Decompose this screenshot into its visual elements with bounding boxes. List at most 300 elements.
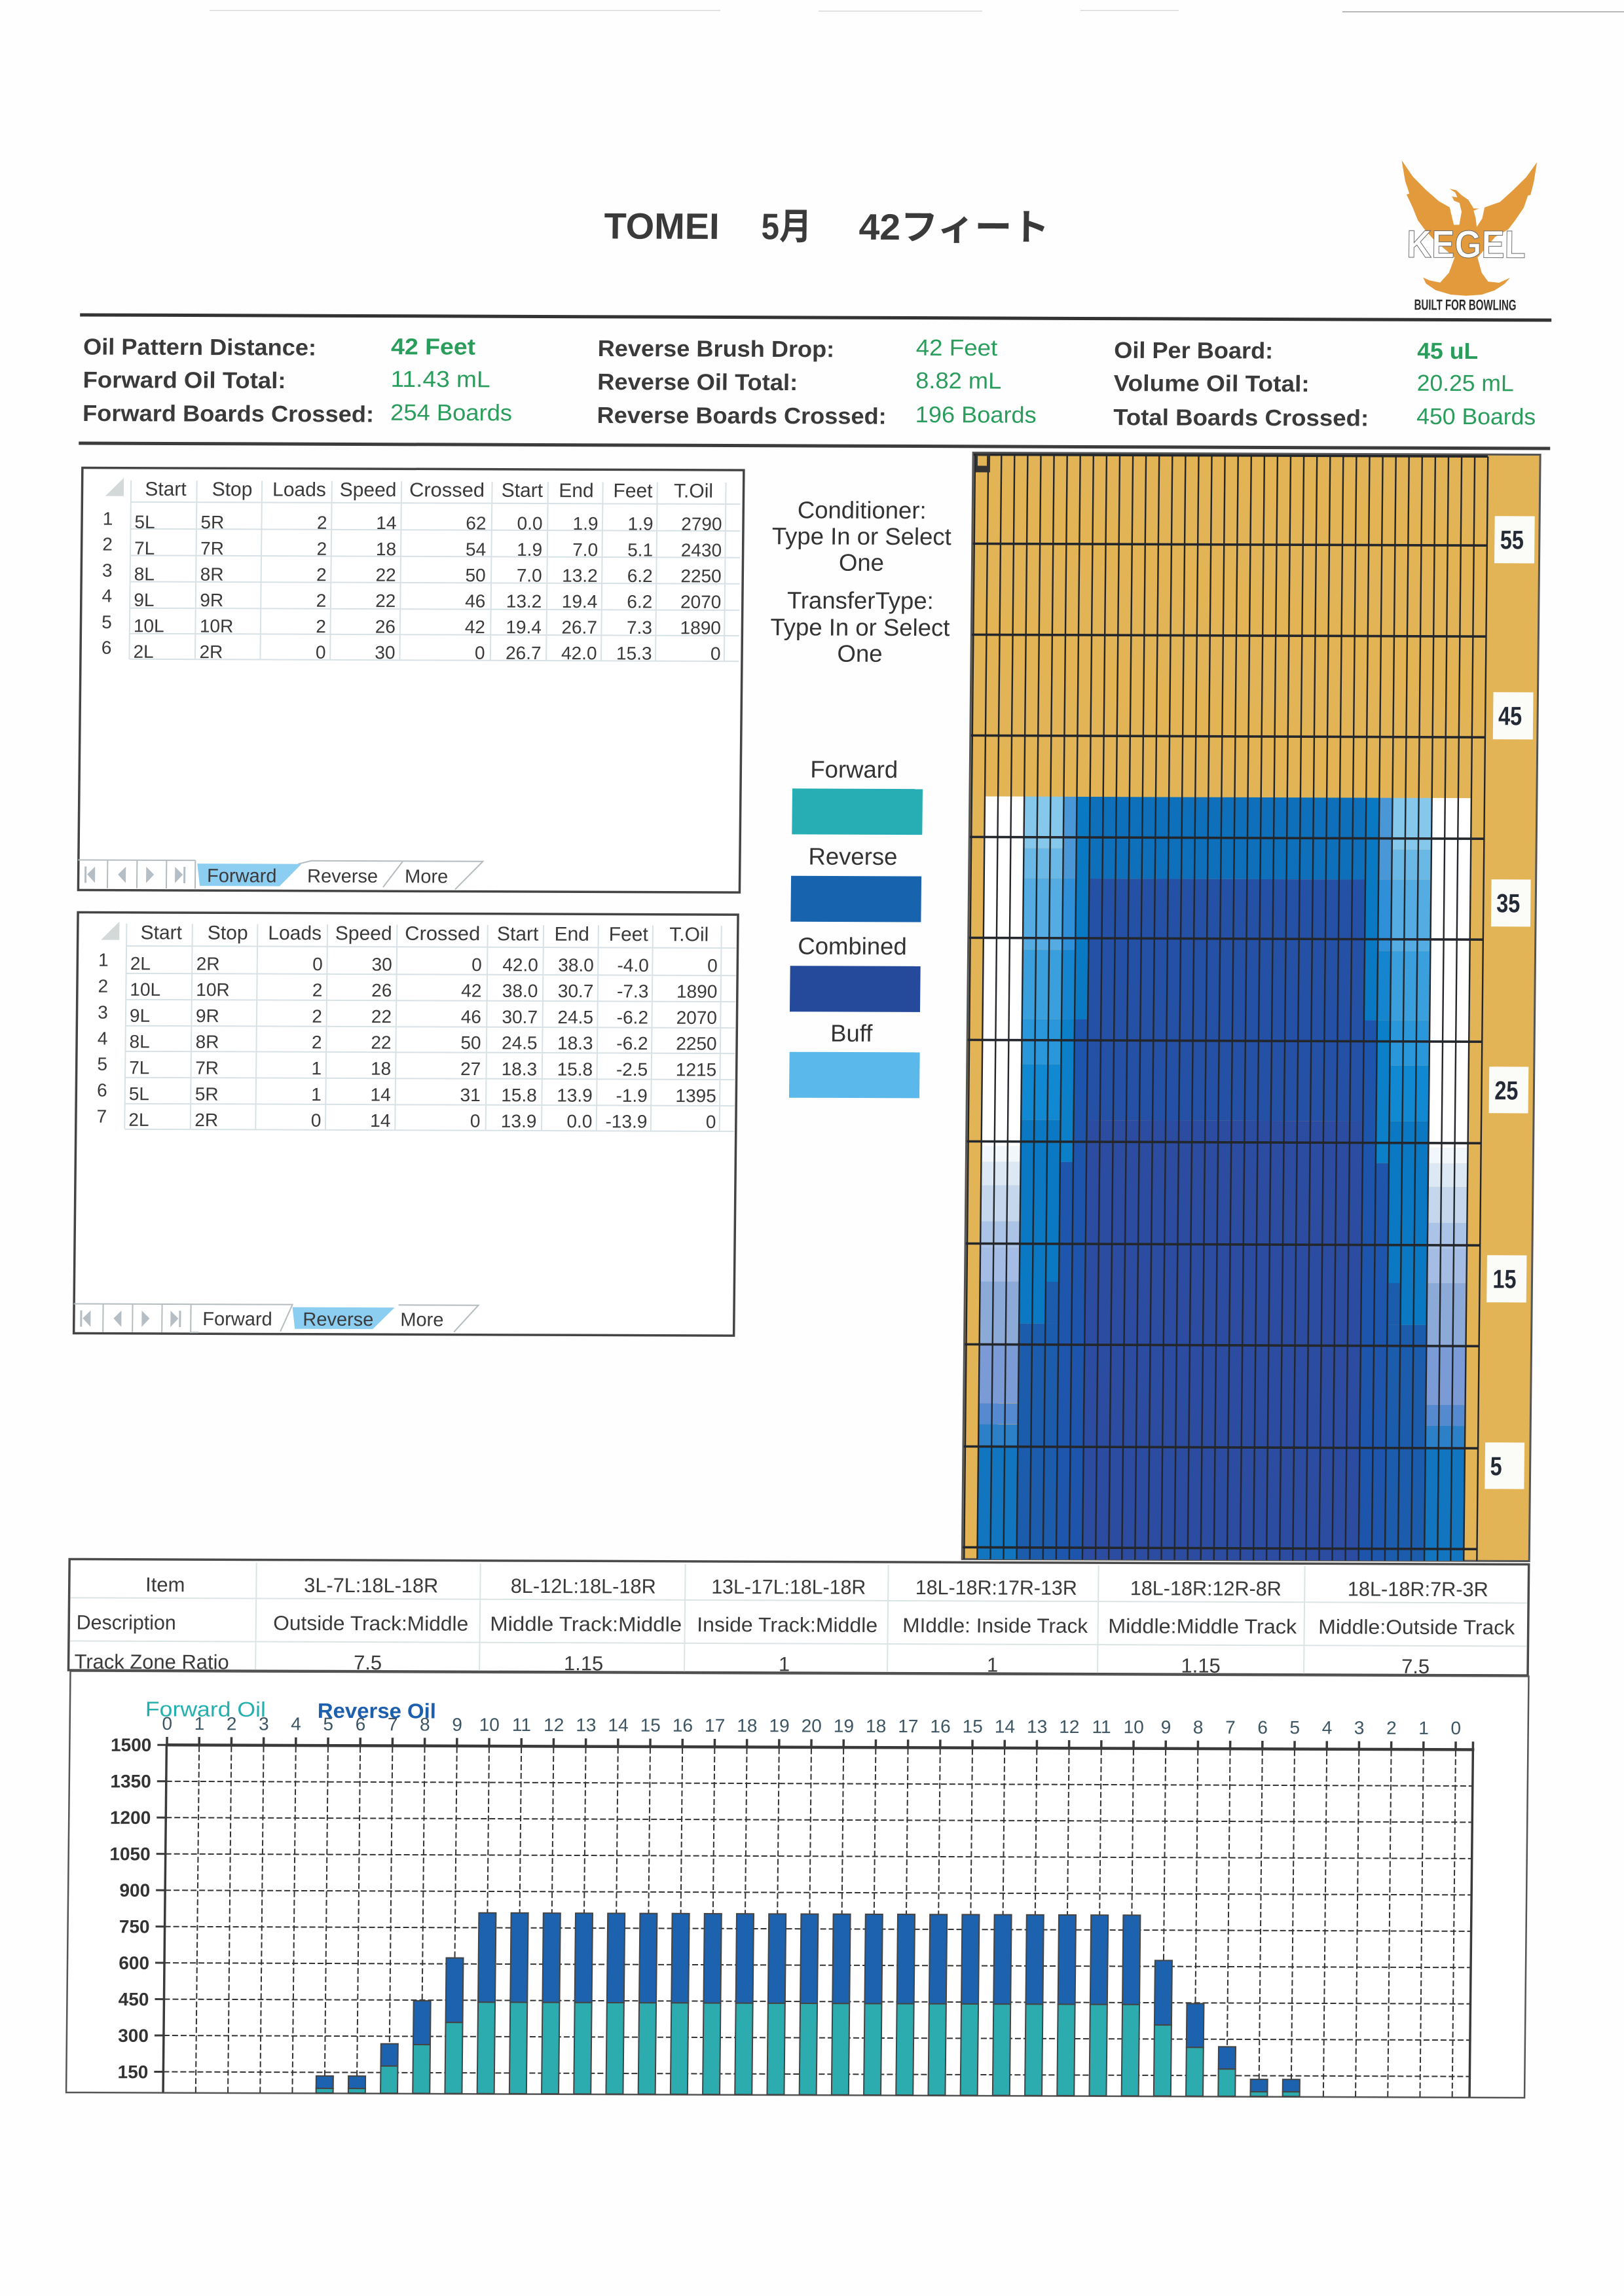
chart x axis labels: 19 xyxy=(834,1716,854,1736)
reverse table row labels xyxy=(97,950,109,1127)
reverse table numeric columns: 2250 xyxy=(676,1033,717,1054)
conditioner and transfer text xyxy=(770,496,951,667)
chart x axis labels: 13 xyxy=(576,1715,597,1735)
distance marker 55 xyxy=(1494,516,1535,563)
reverse table numeric columns: 15.8 xyxy=(557,1059,593,1080)
forward table sheet tabs: Reverse xyxy=(307,866,378,887)
reverse table header: End xyxy=(554,924,589,945)
forward table header: Speed xyxy=(339,479,397,501)
forward table start and stop columns: 2L xyxy=(133,642,154,662)
zone table row: item: 3L-7L:18L-18R xyxy=(304,1574,438,1597)
forward table start and stop columns: 7R xyxy=(200,538,224,558)
reverse table numeric columns: 30 xyxy=(371,954,392,975)
zone table row: ratio: 1.15 xyxy=(564,1652,603,1675)
reverse table numeric columns: 1 xyxy=(311,1058,322,1078)
stats column 1: Forward Oil Total: xyxy=(83,367,286,393)
chart x axis labels: 2 xyxy=(1386,1718,1397,1738)
chart x axis labels: 18 xyxy=(737,1715,758,1736)
chart y axis labels: 1350 xyxy=(110,1771,151,1791)
reverse table numeric columns: 0 xyxy=(312,954,323,974)
reverse table numeric columns: 0.0 xyxy=(566,1111,593,1131)
forward table numeric columns: 1.9 xyxy=(572,513,599,534)
chart x axis labels: 20 xyxy=(802,1716,822,1736)
forward table numeric columns: 26.7 xyxy=(506,643,542,663)
chart x axis labels: 2 xyxy=(227,1713,237,1734)
oil centre zone xyxy=(1082,797,1366,1561)
reverse table numeric columns: 1215 xyxy=(676,1059,716,1080)
reverse table numeric columns: 1890 xyxy=(676,981,718,1002)
reverse table numeric columns: 2 xyxy=(312,1032,322,1052)
reverse table header: Speed xyxy=(335,922,392,945)
forward table numeric columns: 0.0 xyxy=(517,513,543,534)
reverse table numeric columns: 13.9 xyxy=(557,1085,593,1106)
header rule bottom xyxy=(79,441,1550,450)
oil half: left side stacks, mirrored for right side xyxy=(977,796,1090,1559)
board lines xyxy=(964,454,1488,1561)
distance marker 15: 15 xyxy=(1492,1265,1517,1294)
reverse table numeric columns: -4.0 xyxy=(617,955,649,975)
chart y axis labels: 150 xyxy=(117,2062,149,2082)
reverse table header: Crossed xyxy=(405,923,480,945)
forward table start and stop columns: 9L xyxy=(134,590,155,610)
conditioner and transfer text: Type In or Select xyxy=(770,613,950,641)
forward table numeric columns: 14 xyxy=(376,513,397,533)
forward table numeric columns: 0 xyxy=(710,644,721,664)
forward table start and stop columns: 8L xyxy=(134,564,155,584)
reverse table sheet tabs xyxy=(73,1303,479,1334)
forward table numeric columns xyxy=(316,513,722,664)
reverse table start and stop columns: 2L xyxy=(128,1110,149,1130)
forward table start and stop columns: 9R xyxy=(200,590,223,610)
chart x axis labels xyxy=(162,1713,1461,1738)
conditioner and transfer text: Conditioner: xyxy=(798,496,927,524)
logo: Kegel xyxy=(1400,160,1537,314)
distance marker 5: 5 xyxy=(1490,1452,1502,1481)
reverse table numeric columns: 38.0 xyxy=(558,955,594,975)
forward table row labels: 4 xyxy=(101,586,112,606)
reverse table numeric columns: 31 xyxy=(460,1085,481,1105)
reverse table numeric columns: 18 xyxy=(371,1059,391,1079)
stats column 3: Total Boards Crossed: xyxy=(1113,405,1369,431)
chart y axis labels: 1500 xyxy=(111,1735,152,1755)
chart y axis labels: 750 xyxy=(119,1916,150,1937)
panel: forward table xyxy=(78,467,744,892)
zone table row: ratio: 1.15 xyxy=(1181,1654,1221,1677)
distance marker 15 xyxy=(1486,1255,1526,1302)
forward table header: Crossed xyxy=(409,479,485,501)
reverse table start and stop columns: 8L xyxy=(129,1031,150,1051)
forward table start and stop columns: 2R xyxy=(199,642,223,662)
forward table header: T.Oil xyxy=(674,481,713,502)
reverse table numeric columns: 14 xyxy=(370,1084,391,1105)
forward table numeric columns: 19.4 xyxy=(506,617,542,638)
forward table numeric columns: 22 xyxy=(375,591,396,611)
forward oil bars xyxy=(316,2001,1301,2096)
chart legend: forward oil: Forward Oil xyxy=(145,1697,266,1721)
forward table numeric columns: 13.2 xyxy=(562,566,598,586)
chart x axis labels: 12 xyxy=(1059,1717,1080,1737)
reverse table numeric columns: 14 xyxy=(370,1110,391,1131)
forward table start and stop columns: 5R xyxy=(200,512,224,532)
forward table numeric columns: 5.1 xyxy=(627,539,653,560)
chart x axis labels: 12 xyxy=(544,1715,564,1735)
zone table row: description: Middle Track:Middle xyxy=(490,1613,682,1636)
legend: forward xyxy=(792,756,923,835)
chart y axis labels: 600 xyxy=(119,1953,149,1973)
reverse table row labels: 7 xyxy=(97,1106,107,1127)
chart x axis labels: 14 xyxy=(608,1715,629,1736)
reverse table row labels: 4 xyxy=(98,1029,108,1049)
header rule top xyxy=(80,313,1551,322)
forward table header: Loads xyxy=(272,479,326,501)
reverse table start and stop columns: 7R xyxy=(195,1058,219,1078)
chart x axis labels: 6 xyxy=(356,1714,365,1734)
forward table header xyxy=(145,479,713,502)
distance marker 25 xyxy=(1489,1066,1528,1113)
chart y axis labels: 300 xyxy=(118,2026,149,2046)
forward table numeric columns: 2 xyxy=(316,539,327,559)
distance marker 45 xyxy=(1493,692,1534,739)
zone table row: ratio: 7.5 xyxy=(1401,1655,1430,1678)
reverse oil bars xyxy=(316,1912,1301,2092)
reverse table numeric columns: -6.2 xyxy=(616,1033,648,1053)
panel: reverse table xyxy=(73,912,738,1336)
zone table row: item: 18L-18R:17R-13R xyxy=(915,1576,1077,1599)
distance marker 35: 35 xyxy=(1496,889,1520,918)
forward table header: End xyxy=(559,480,594,501)
stats column 2: 42 Feet xyxy=(916,335,998,361)
reverse table header: T.Oil xyxy=(669,924,709,945)
stats column 1: 42 Feet xyxy=(391,334,476,360)
forward table numeric columns: 15.3 xyxy=(616,643,652,664)
forward table numeric columns: 2 xyxy=(316,591,326,611)
stats column 3: Volume Oil Total: xyxy=(1114,371,1310,397)
zone table row: ratio: 1 xyxy=(987,1654,998,1677)
conditioner and transfer text: One xyxy=(837,640,883,667)
reverse table header: Start xyxy=(140,922,183,944)
chart x axis labels: 9 xyxy=(1161,1717,1171,1738)
forward table row labels: 5 xyxy=(101,612,112,632)
zone table row: description: Outside Track:Middle xyxy=(273,1612,468,1635)
forward table numeric columns: 1890 xyxy=(680,617,721,638)
reverse table row labels: 3 xyxy=(98,1002,108,1023)
chart y axis labels: 1050 xyxy=(109,1844,151,1864)
reverse table sheet tabs: More xyxy=(400,1309,444,1331)
reverse table start and stop columns: 2R xyxy=(196,954,220,974)
reverse table sheet tabs: Forward xyxy=(202,1309,272,1330)
stats column 1: 11.43 mL xyxy=(390,367,490,392)
zone table row: item: 18L-18R:12R-8R xyxy=(1130,1576,1282,1600)
chart x axis labels: 1 xyxy=(194,1713,204,1734)
chart x axis labels: 11 xyxy=(512,1715,531,1735)
chart x axis labels: 1 xyxy=(1418,1718,1429,1738)
chart x axis labels: 3 xyxy=(1354,1718,1365,1738)
reverse table numeric columns: 0 xyxy=(706,1112,716,1132)
chart x axis labels: 7 xyxy=(388,1714,398,1734)
zone table row: description: Middle:Outside Track xyxy=(1318,1615,1515,1639)
zone table row: description: Middle:Middle Track xyxy=(1108,1614,1297,1638)
distance marker 45: 45 xyxy=(1498,702,1522,731)
zone table row: item: 18L-18R:7R-3R xyxy=(1348,1577,1488,1601)
chart grid xyxy=(163,1746,1473,2097)
stats column 3: 450 Boards xyxy=(1416,404,1536,429)
reverse table numeric columns: 27 xyxy=(460,1059,481,1079)
chart x axis labels: 6 xyxy=(1257,1717,1268,1738)
forward table numeric columns: 19.4 xyxy=(562,591,598,611)
zone table row: item: 8L-12L:18L-18R xyxy=(511,1575,656,1598)
forward table header: Start xyxy=(502,480,544,501)
forward table row labels xyxy=(101,509,113,658)
reverse table start and stop columns: 10R xyxy=(196,979,230,1000)
forward table numeric columns: 62 xyxy=(466,513,487,534)
forward table numeric columns: 0 xyxy=(475,643,485,663)
forward table numeric columns: 2250 xyxy=(680,566,722,586)
reverse table numeric columns: 46 xyxy=(461,1007,481,1027)
forward table numeric columns: 30 xyxy=(375,642,396,663)
reverse table start and stop columns: 9R xyxy=(196,1006,219,1026)
chart x axis labels: 11 xyxy=(1092,1717,1111,1737)
forward table start and stop columns: 8R xyxy=(200,564,224,585)
chart y axis labels: 450 xyxy=(119,1989,149,2009)
reverse table start and stop columns: 8R xyxy=(195,1032,219,1052)
forward table numeric columns: 6.2 xyxy=(627,566,653,586)
reverse table numeric columns: 18.3 xyxy=(557,1033,593,1053)
reverse table numeric columns: 18.3 xyxy=(502,1059,537,1080)
reverse table numeric columns: 1395 xyxy=(675,1085,716,1106)
reverse table numeric columns: 0 xyxy=(470,1111,481,1131)
stats column 1: 254 Boards xyxy=(390,400,512,426)
reverse table numeric columns: 50 xyxy=(460,1032,481,1053)
reverse table numeric columns: 30.7 xyxy=(558,981,594,1001)
forward table row labels: 1 xyxy=(103,509,113,529)
title: 5月 xyxy=(761,206,812,247)
forward table numeric columns: 7.3 xyxy=(627,617,652,638)
chart x axis labels: 7 xyxy=(1225,1717,1236,1738)
distance marker 5 xyxy=(1485,1442,1524,1489)
forward table numeric columns: 42.0 xyxy=(561,643,597,663)
reverse table numeric columns: 42 xyxy=(461,981,482,1001)
lane corner marker xyxy=(976,454,990,472)
chart x axis labels: 16 xyxy=(930,1716,951,1736)
forward table start and stop columns: 10R xyxy=(200,616,233,636)
reverse table numeric columns: 0 xyxy=(707,955,718,975)
forward table numeric columns: 13.2 xyxy=(506,591,542,611)
forward table row labels: 6 xyxy=(101,638,112,658)
zone table row: ratio: Track Zone Ratio xyxy=(74,1650,229,1673)
reverse table numeric columns: 22 xyxy=(371,1032,392,1053)
forward table numeric columns: 7.0 xyxy=(572,539,598,560)
chart x axis labels: 16 xyxy=(673,1715,693,1736)
forward table numeric columns: 0 xyxy=(316,642,326,663)
legend: reverse xyxy=(790,843,922,922)
legend: forward: Forward xyxy=(810,756,898,783)
reverse table start and stop columns: 2L xyxy=(130,953,151,974)
panel: lane oil pattern xyxy=(962,452,1540,1561)
reverse table numeric columns: 13.9 xyxy=(501,1111,537,1131)
chart x axis labels: 15 xyxy=(640,1715,661,1736)
reverse table row labels: 2 xyxy=(98,976,108,996)
forward table numeric columns: 2070 xyxy=(680,592,721,612)
stats column 2: 8.82 mL xyxy=(915,368,1001,394)
reverse table start and stop columns: 5L xyxy=(129,1084,149,1104)
distance marker 35 xyxy=(1491,879,1531,926)
stats column 2: 196 Boards xyxy=(915,402,1037,428)
reverse table numeric columns: -7.3 xyxy=(617,981,649,1002)
oil right side mirror xyxy=(1359,798,1471,1561)
forward table sheet tabs xyxy=(78,860,483,890)
chart y axis labels: 900 xyxy=(119,1880,150,1901)
zone table row: ratio: 1 xyxy=(779,1652,790,1675)
chart x axis labels: 17 xyxy=(898,1716,919,1736)
reverse table numeric columns: 30.7 xyxy=(502,1007,538,1027)
reverse table numeric columns: 2070 xyxy=(676,1008,717,1028)
conditioner and transfer text: TransferType: xyxy=(787,587,934,614)
reverse table start and stop columns: 5R xyxy=(195,1084,219,1104)
zone table row: item: Item xyxy=(145,1573,185,1596)
conditioner and transfer text: One xyxy=(839,549,884,576)
legend: reverse: Reverse xyxy=(808,843,898,870)
zone table row: description: Inside Track:Middle xyxy=(697,1613,877,1637)
forward table sheet tabs: Forward xyxy=(207,866,277,887)
reverse table row labels: 1 xyxy=(98,950,109,970)
reverse table header: Start xyxy=(497,923,539,945)
zone table row: description: MIddle: Inside Track xyxy=(902,1614,1088,1637)
forward table numeric columns: 2790 xyxy=(681,514,722,534)
zone table row: ratio xyxy=(74,1650,1430,1678)
reverse table numeric columns: 26 xyxy=(371,980,392,1000)
reverse table start and stop columns: 7L xyxy=(129,1057,150,1078)
reverse table start and stop columns xyxy=(128,953,230,1130)
zone table row: description: Description xyxy=(77,1611,176,1634)
legend: combined: Combined xyxy=(798,932,907,960)
chart x axis labels: 13 xyxy=(1027,1717,1047,1737)
chart x axis labels: 15 xyxy=(963,1716,983,1736)
chart x axis labels: 8 xyxy=(420,1714,430,1734)
chart x axis labels: 4 xyxy=(291,1714,301,1734)
title: TOMEI xyxy=(604,205,720,247)
chart x axis labels: 5 xyxy=(1289,1717,1300,1738)
zone table row: description xyxy=(77,1611,1515,1639)
chart x axis labels: 17 xyxy=(705,1715,725,1736)
chart x axis labels: 3 xyxy=(259,1714,269,1734)
chart x axis labels: 0 xyxy=(162,1713,172,1734)
forward table numeric columns: 2 xyxy=(316,616,326,636)
reverse table numeric columns: 15.8 xyxy=(501,1085,537,1105)
stats column 2: Reverse Brush Drop: xyxy=(598,336,834,362)
reverse table start and stop columns: 2R xyxy=(194,1110,218,1130)
reverse table row labels: 5 xyxy=(97,1054,107,1074)
chart axes and ticks xyxy=(154,1737,1474,2097)
zone table row: ratio: 7.5 xyxy=(354,1651,382,1674)
forward table numeric columns: 22 xyxy=(375,565,396,585)
stats column 1: Oil Pattern Distance: xyxy=(83,334,316,361)
reverse table start and stop columns: 9L xyxy=(130,1006,150,1026)
forward table numeric columns: 2 xyxy=(316,564,327,585)
forward table numeric columns: 6.2 xyxy=(627,591,653,612)
forward table header: Feet xyxy=(613,480,653,502)
forward table numeric columns: 26 xyxy=(375,617,396,637)
forward table numeric columns: 42 xyxy=(465,617,485,637)
forward table start and stop columns: 5L xyxy=(134,512,155,532)
chart x axis labels: 5 xyxy=(323,1714,333,1734)
forward table numeric columns: 2 xyxy=(317,513,327,533)
chart x axis labels: 9 xyxy=(452,1715,462,1735)
forward table numeric columns: 1.9 xyxy=(627,513,654,534)
stats column 3: 20.25 mL xyxy=(1417,371,1514,396)
distance marker 55: 55 xyxy=(1500,526,1524,555)
reverse table numeric columns: 2 xyxy=(312,1006,322,1027)
reverse table numeric columns: -6.2 xyxy=(617,1007,648,1028)
chart y axis labels xyxy=(107,1735,152,2082)
chart legend: reverse oil: Reverse Oil xyxy=(318,1699,436,1722)
legend: combined xyxy=(790,932,921,1012)
reverse table row labels: 6 xyxy=(97,1080,107,1101)
stats column 2: Reverse Boards Crossed: xyxy=(597,403,887,429)
legend: buff: Buff xyxy=(830,1020,873,1047)
chart x axis labels: 10 xyxy=(1124,1717,1144,1737)
conditioner and transfer text: Type In or Select xyxy=(772,522,951,550)
stats column 1 xyxy=(83,333,513,428)
forward table numeric columns: 18 xyxy=(376,539,396,559)
chart x axis labels: 8 xyxy=(1193,1717,1204,1738)
panel: oil per board chart xyxy=(66,1671,1528,2098)
stats column 1: Forward Boards Crossed: xyxy=(83,401,374,428)
logo: Kegel: KEGEL xyxy=(1407,222,1526,266)
reverse table header: Feet xyxy=(609,924,649,945)
reverse table sheet tabs: Reverse xyxy=(303,1309,374,1330)
reverse table numeric columns: 24.5 xyxy=(502,1032,538,1053)
stats column 2 xyxy=(597,334,1037,429)
forward table numeric columns: 2430 xyxy=(681,540,722,560)
forward table numeric columns: 54 xyxy=(466,539,486,560)
reverse table numeric columns: -2.5 xyxy=(616,1059,648,1080)
zone table row: item xyxy=(145,1573,1488,1601)
forward table header: Stop xyxy=(212,479,253,500)
panel: track zone ratio table xyxy=(68,1559,1529,1678)
forward table numeric columns: 26.7 xyxy=(561,617,597,638)
reverse table numeric columns: 1 xyxy=(311,1084,322,1104)
chart y axis labels: 1200 xyxy=(110,1808,151,1828)
reverse table numeric columns: 38.0 xyxy=(502,981,538,1001)
forward table header: Start xyxy=(145,479,187,500)
reverse table header: Stop xyxy=(208,922,248,944)
reverse table numeric columns xyxy=(311,954,718,1132)
reverse table header xyxy=(140,922,709,945)
reverse table numeric columns: 42.0 xyxy=(502,955,538,975)
reverse table numeric columns: -1.9 xyxy=(616,1085,648,1106)
stats column 2: Reverse Oil Total: xyxy=(597,369,798,395)
legend: buff xyxy=(789,1019,920,1098)
reverse table numeric columns: 0 xyxy=(311,1110,322,1131)
chart x axis labels: 18 xyxy=(866,1716,886,1736)
scanned page content xyxy=(62,155,1553,2098)
logo: Kegel: BUILT FOR BOWLING xyxy=(1414,296,1517,314)
forward table numeric columns: 46 xyxy=(465,591,485,611)
reverse table numeric columns: 24.5 xyxy=(557,1007,593,1027)
zone table row: item: 13L-17L:18L-18R xyxy=(711,1575,866,1599)
forward table sheet tabs: More xyxy=(405,866,448,888)
chart x axis labels: 4 xyxy=(1322,1717,1332,1738)
reverse table numeric columns: -13.9 xyxy=(605,1111,648,1132)
chart x axis labels: 14 xyxy=(995,1717,1015,1737)
stats column 3 xyxy=(1113,337,1536,431)
reverse table numeric columns: 2 xyxy=(312,980,323,1000)
forward table row labels: 3 xyxy=(102,560,113,581)
forward table row labels: 2 xyxy=(102,534,113,555)
title: 42フィート xyxy=(858,206,1050,248)
forward table start and stop columns: 7L xyxy=(134,538,155,558)
forward table start and stop columns: 10L xyxy=(134,615,164,636)
